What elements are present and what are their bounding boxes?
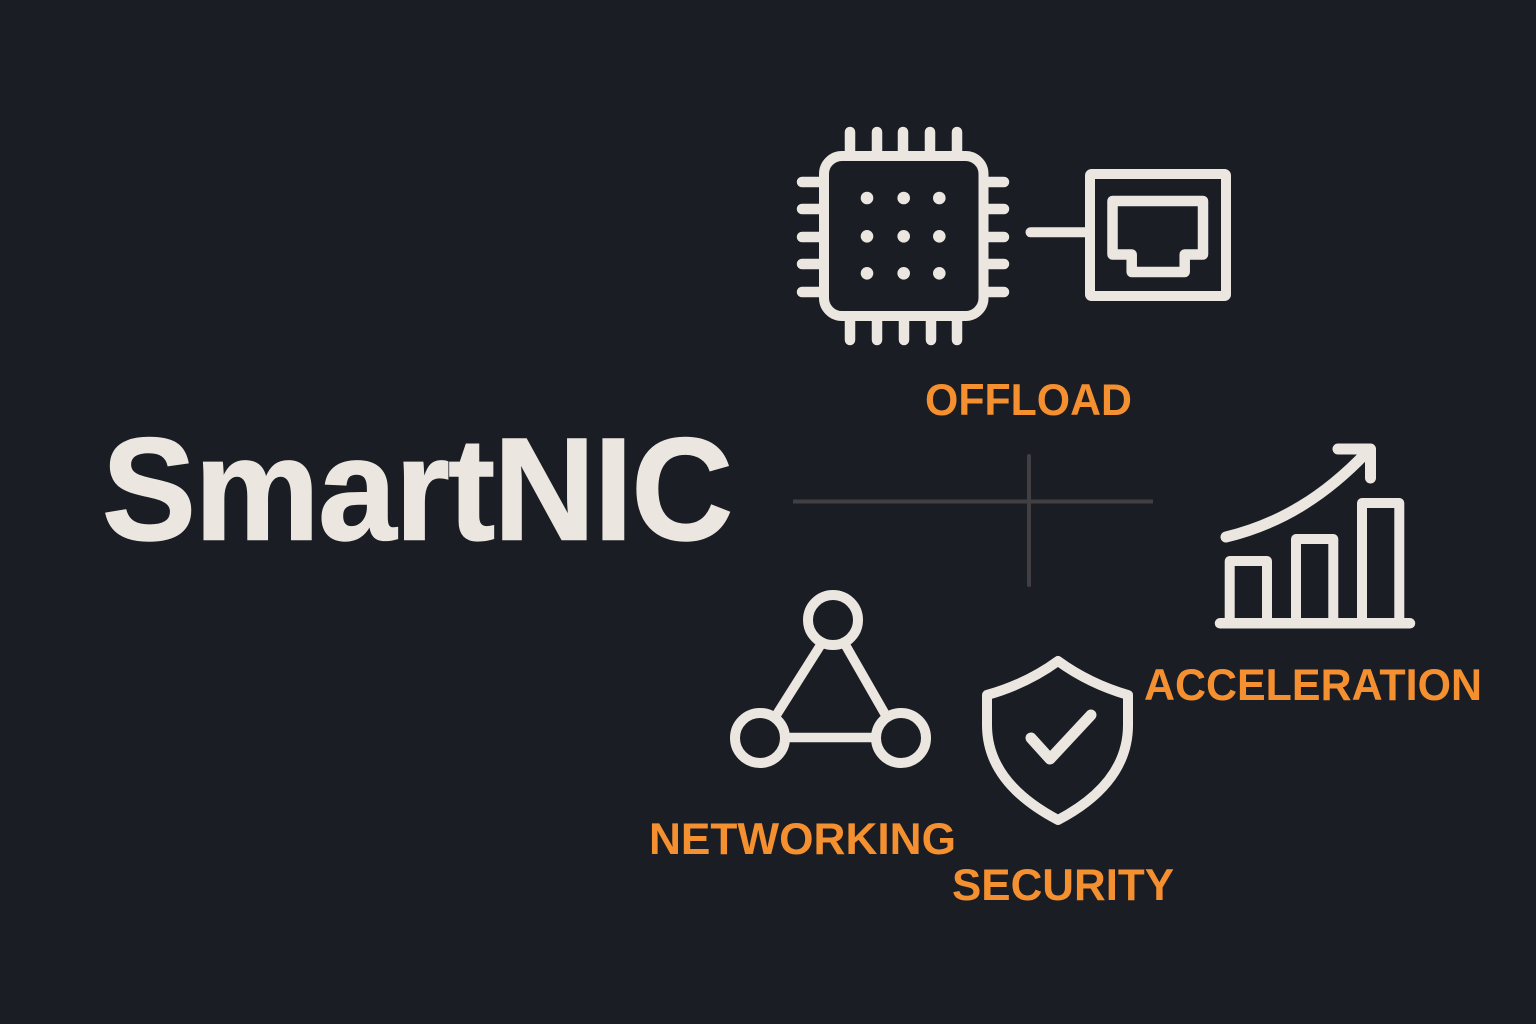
icon: network triangle	[735, 595, 926, 763]
label: acceleration: ACCELERATION	[1144, 661, 1482, 710]
label: security: SECURITY	[952, 861, 1174, 910]
title: SmartNIC	[102, 408, 732, 571]
icon: chip connected to network port	[802, 132, 1226, 340]
connector line	[1030, 227, 1090, 237]
label: offload: OFFLOAD	[925, 376, 1132, 425]
cross connector	[793, 454, 1153, 587]
icon: acceleration bar chart with arrow	[1220, 449, 1410, 623]
icon: ethernet port	[1090, 174, 1226, 296]
icon: security shield with check	[987, 661, 1128, 820]
label: networking: NETWORKING	[649, 815, 956, 864]
icon: processor chip	[802, 132, 1004, 340]
